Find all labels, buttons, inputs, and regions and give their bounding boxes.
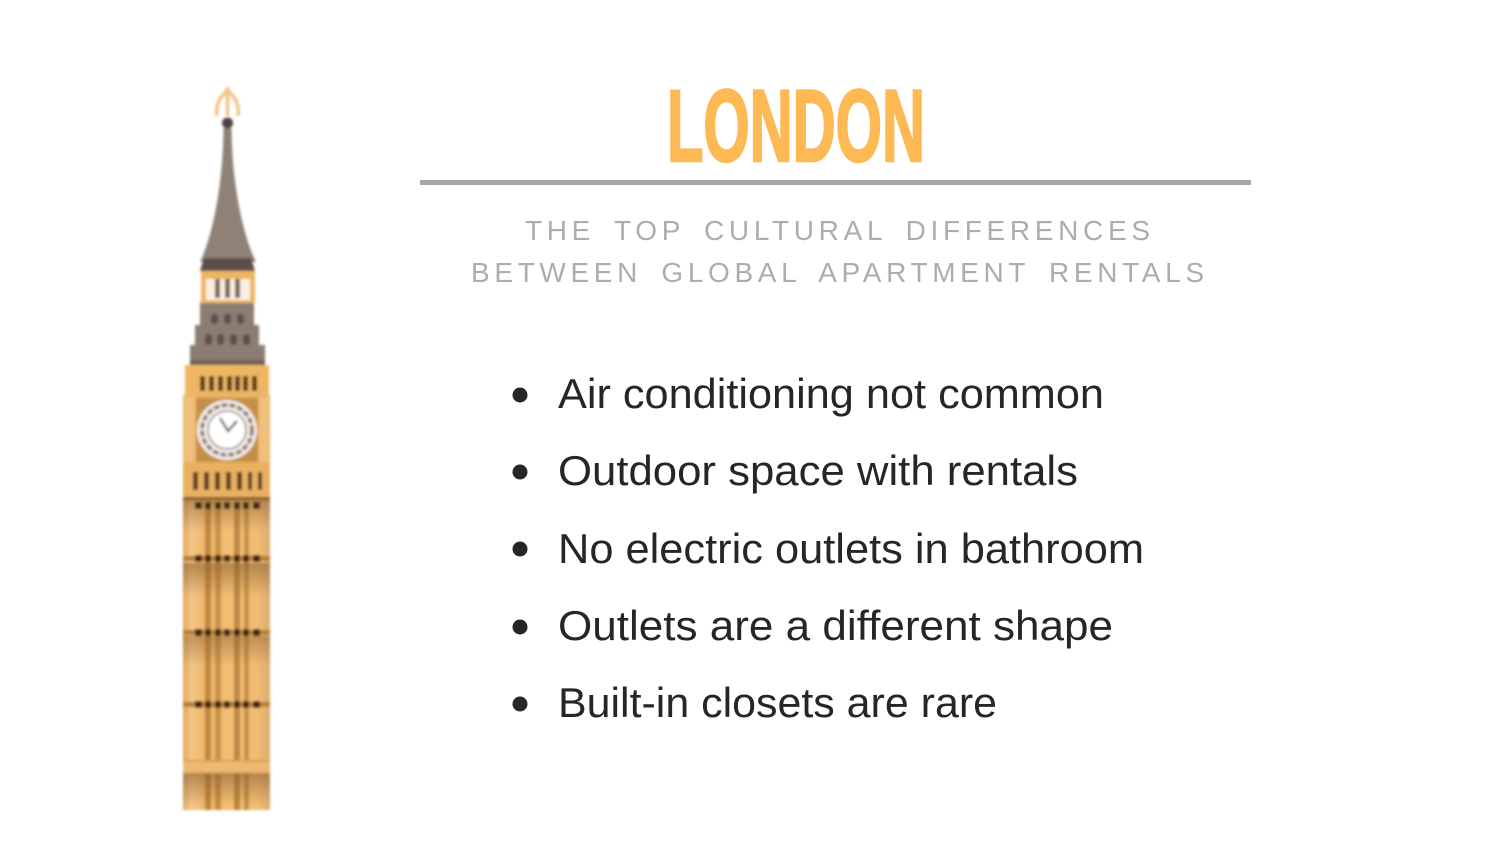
bullet: outdoor space: Outdoor space with rentals — [558, 447, 1078, 494]
illustration: Big Ben clock tower — [183, 87, 270, 810]
subtitle: THE TOP CULTURAL DIFFERENCES — [525, 215, 1150, 246]
window rows — [195, 502, 260, 708]
belfry stepped base — [190, 302, 265, 365]
bullet: electric outlets: No electric outlets in bathroom — [558, 525, 1144, 572]
spire finial — [217, 87, 238, 116]
spire — [200, 118, 256, 271]
divider line — [420, 180, 1251, 185]
bullet list — [512, 370, 1144, 726]
subtitle: BETWEEN GLOBAL APARTMENT RENTALS — [471, 257, 1204, 288]
bullet: outlet shape: Outlets are a different shape — [558, 602, 1113, 649]
tower shaft — [183, 495, 270, 810]
belfry lantern — [201, 271, 255, 303]
title: LONDON — [667, 69, 925, 183]
bullet: air conditioning: Air conditioning not common — [558, 370, 1104, 417]
subtitle — [471, 215, 1204, 288]
icon: clock face — [197, 400, 257, 460]
bullet: closets: Built-in closets are rare — [558, 679, 997, 726]
clock section — [183, 365, 270, 497]
